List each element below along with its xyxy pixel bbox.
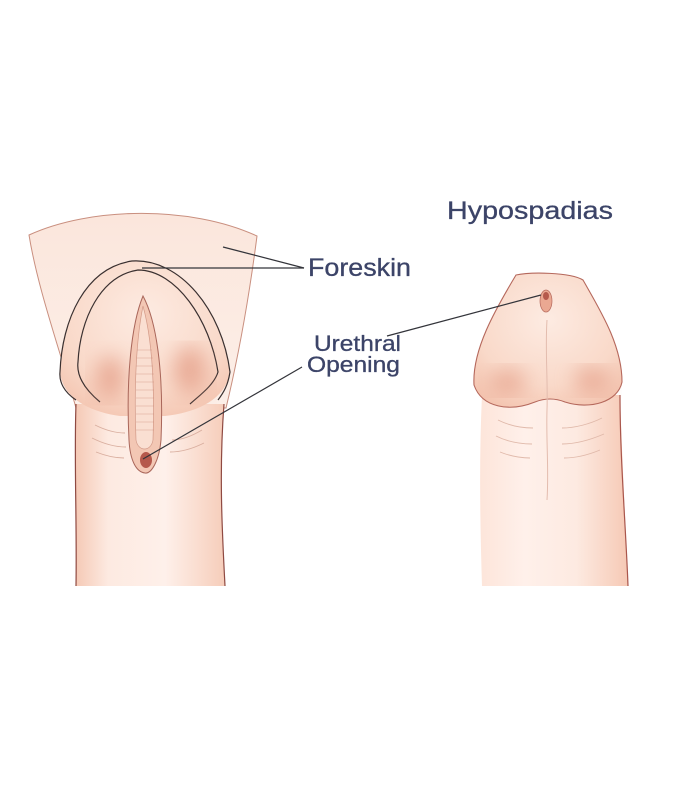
label: Foreskin: Foreskin	[308, 254, 411, 282]
inner urethral plate	[135, 306, 154, 449]
plate hatching	[136, 350, 154, 430]
right shaft outline	[620, 395, 628, 586]
leader lines	[142, 247, 541, 459]
glans	[60, 261, 230, 416]
inner opening	[543, 292, 549, 300]
right creases	[496, 418, 604, 458]
right illustration: hypospadias	[474, 273, 628, 586]
left shaft outline	[75, 404, 225, 586]
skin creases	[92, 425, 204, 458]
foreskin flap	[29, 213, 257, 408]
right glans	[474, 273, 622, 407]
central raphe	[546, 320, 548, 500]
label: Hypospadias: Hypospadias	[447, 197, 613, 225]
urethral opening	[140, 452, 152, 468]
hypospadias opening	[540, 290, 552, 312]
label: Opening: Opening	[307, 352, 400, 377]
left shaft	[75, 404, 225, 586]
urethral plate groove	[128, 296, 162, 473]
label: Urethral: Urethral	[314, 331, 401, 356]
left illustration: foreskin and urethral opening	[29, 213, 257, 586]
hood outline	[60, 261, 230, 404]
lobe shading	[96, 346, 206, 400]
right glans shading	[490, 366, 610, 395]
right shaft	[480, 395, 628, 586]
